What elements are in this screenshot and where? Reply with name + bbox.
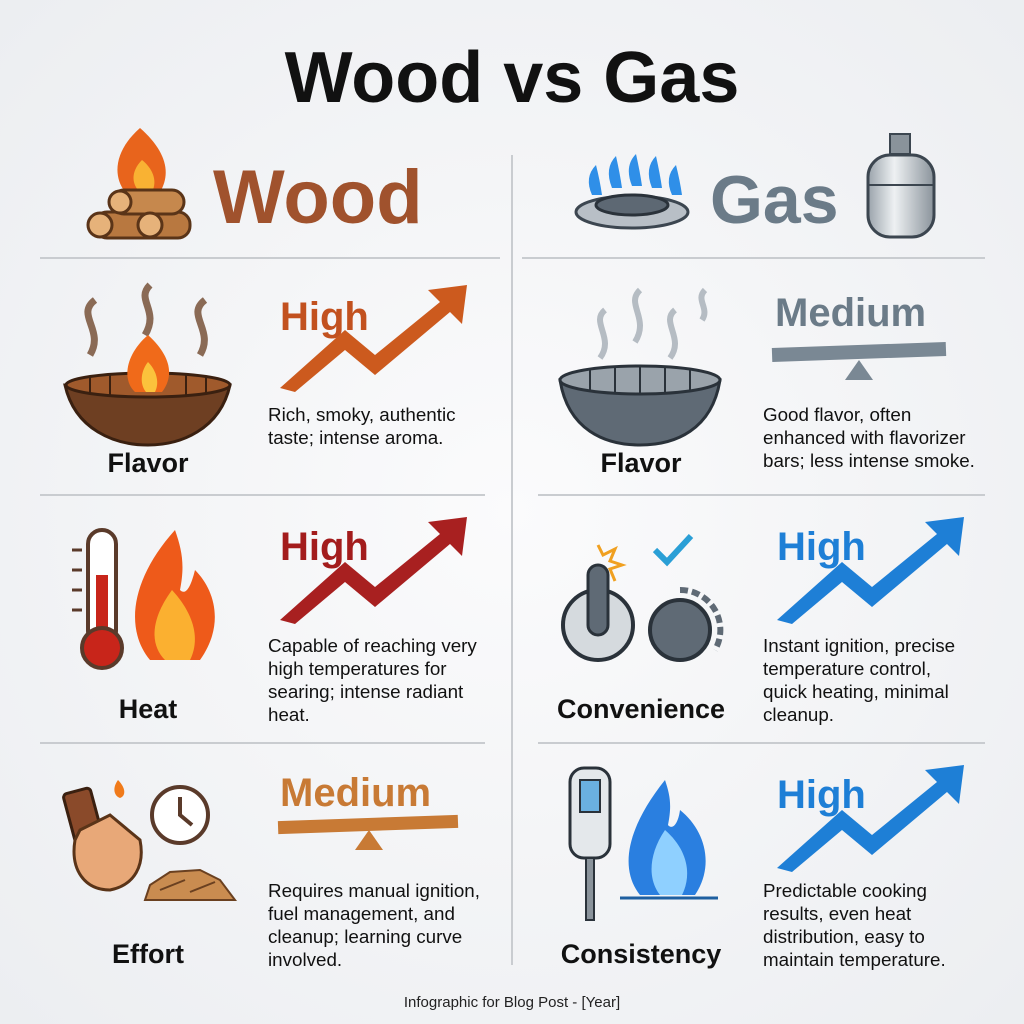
arrow: rising [280, 285, 467, 392]
icon: ignition knob and dial with check [563, 536, 720, 660]
description: taste; intense aroma. [268, 427, 443, 448]
description: Predictable cooking [763, 880, 927, 901]
description: heat. [268, 704, 310, 725]
description: cleanup. [763, 704, 834, 725]
icon: propane tank [868, 134, 934, 237]
description: Rich, smoky, authentic [268, 404, 456, 425]
icon: balance [772, 342, 946, 380]
description: Requires manual ignition, [268, 880, 480, 901]
heading: Wood: Wood [213, 155, 423, 240]
description: searing; intense radiant [268, 681, 464, 702]
label: Flavor: Flavor [107, 448, 189, 478]
label: Effort: Effort [112, 939, 184, 969]
description: distribution, easy to [763, 926, 925, 947]
description: enhanced with flavorizer [763, 427, 966, 448]
description: Capable of reaching very [268, 635, 477, 656]
description: Good flavor, often [763, 404, 911, 425]
label: Heat: Heat [119, 694, 177, 724]
rating: High: High [280, 525, 369, 569]
panel: wood effort [63, 771, 480, 970]
icon: grill with fire and smoke [65, 285, 230, 445]
rating: High: High [777, 773, 866, 817]
footer: Infographic for Blog Post - [Year] [404, 994, 620, 1011]
rating: High: High [777, 525, 866, 569]
heading: Gas: Gas [710, 162, 839, 238]
rating: Medium: Medium [280, 771, 431, 815]
icon: hand with lighter, clock, wood chips [63, 780, 235, 900]
label: Consistency: Consistency [561, 939, 721, 969]
label: Flavor: Flavor [600, 448, 682, 478]
arrow: rising [777, 517, 964, 624]
panel: gas consistency [561, 765, 964, 970]
panel: gas convenience [557, 517, 964, 725]
arrow: rising [777, 765, 964, 872]
label: Convenience: Convenience [557, 694, 725, 724]
header: wood [88, 128, 423, 240]
description: Instant ignition, precise [763, 635, 955, 656]
title: Wood vs Gas [285, 38, 739, 118]
icon: gas burner [576, 154, 688, 228]
description: temperature control, [763, 658, 931, 679]
header: gas [576, 134, 934, 238]
panel: gas flavor [560, 290, 975, 478]
panel: wood flavor [65, 285, 467, 478]
description: quick heating, minimal [763, 681, 949, 702]
description: results, even heat [763, 903, 912, 924]
arrow: rising [280, 517, 467, 624]
description: high temperatures for [268, 658, 447, 679]
rating: High: High [280, 295, 369, 339]
panel: wood heat [72, 517, 477, 725]
description: cleanup; learning curve [268, 926, 462, 947]
description: bars; less intense smoke. [763, 450, 975, 471]
description: maintain temperature. [763, 949, 946, 970]
icon: digital thermometer and blue flame [570, 768, 718, 920]
icon: balance [278, 815, 458, 850]
rating: Medium: Medium [775, 291, 926, 335]
icon: logs with fire [88, 128, 190, 238]
icon: gas grill with smoke [560, 290, 720, 445]
description: involved. [268, 949, 342, 970]
icon: thermometer and flame [72, 530, 215, 668]
description: fuel management, and [268, 903, 455, 924]
